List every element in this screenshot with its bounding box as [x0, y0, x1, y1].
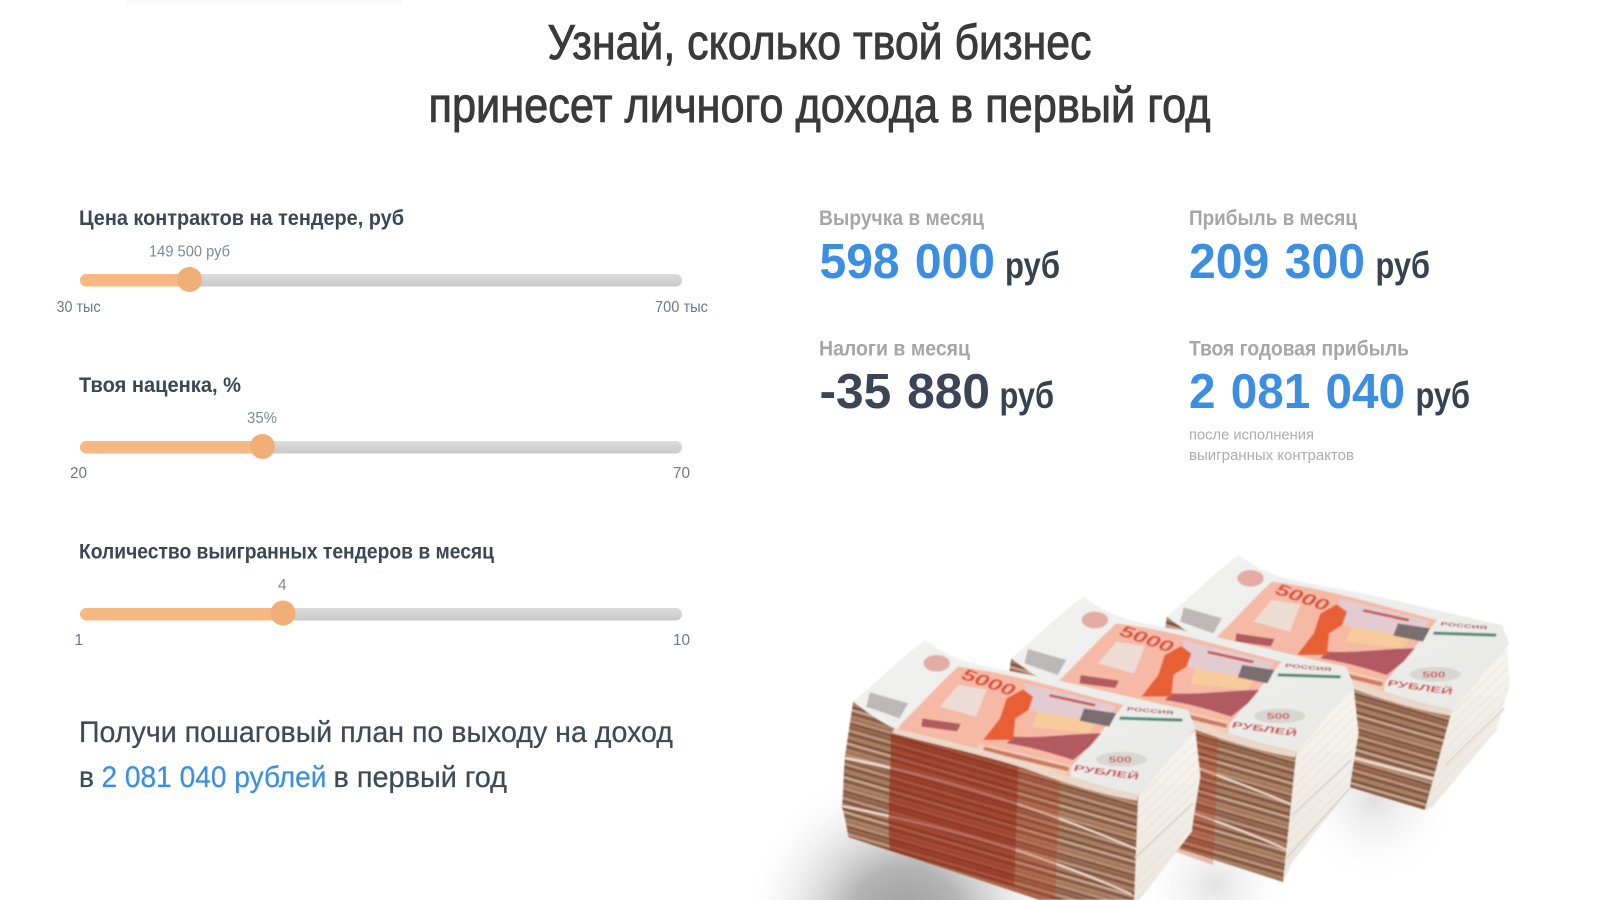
call to action text: [79, 716, 673, 794]
slider fill: contract price: [80, 274, 190, 286]
stat: annual profit: выигранных контрактов: [1189, 447, 1354, 464]
call to action text: в: [79, 761, 94, 794]
stat: annual profit: Твоя годовая прибыль: [1189, 338, 1409, 360]
title: Узнай, сколько твой бизнес: [548, 16, 1092, 70]
slider label: tenders won: Количество выигранных тендеров в месяц: [79, 540, 494, 564]
back stack: [1159, 555, 1510, 810]
stat: annual profit: [1189, 338, 1470, 464]
call to action text: Получи пошаговый план по выходу на доход: [79, 716, 673, 749]
range maximum: tenders won: 10: [673, 632, 690, 649]
stat: monthly taxes: -35 880: [820, 365, 990, 419]
slider knob: tenders won: [270, 600, 296, 626]
slider track: markup: [80, 441, 682, 454]
range minimum: tenders won: 1: [74, 632, 83, 649]
middle stack: [1000, 597, 1359, 882]
stat: monthly profit: 209 300: [1189, 235, 1365, 289]
slider fill: tenders won: [80, 608, 283, 620]
title: [428, 16, 1210, 133]
call to action text: в первый год: [334, 761, 507, 794]
stat: monthly revenue: [819, 207, 1060, 289]
stat: monthly revenue: Выручка в месяц: [819, 207, 984, 230]
range maximum: contract price: 700 тыс: [655, 299, 708, 316]
stat: monthly revenue: руб: [1005, 245, 1060, 286]
image: stacks of banknotes: [740, 555, 1510, 900]
current value: markup: 35%: [247, 410, 277, 427]
stat: monthly revenue: 598 000: [820, 235, 995, 289]
range minimum: markup: 20: [70, 465, 87, 482]
top edge shadow: [127, 0, 402, 8]
stack shadows: [740, 715, 1460, 900]
current value: tenders won: 4: [278, 577, 287, 594]
stat: monthly profit: Прибыль в месяц: [1189, 207, 1357, 230]
stat: annual profit: руб: [1416, 375, 1470, 416]
range maximum: markup: 70: [673, 465, 690, 482]
slider knob: contract price: [177, 267, 202, 292]
stat: monthly taxes: [819, 338, 1054, 419]
panel: contract price slider: [56, 207, 708, 316]
title: принесет личного дохода в первый год: [428, 79, 1210, 133]
slider label: contract price: Цена контрактов на тендере, руб: [79, 207, 404, 230]
slider track: tenders won: [80, 608, 682, 620]
slider track: contract price: [80, 274, 682, 286]
stat: monthly taxes: руб: [1000, 375, 1054, 416]
stat: monthly taxes: Налоги в месяц: [819, 338, 970, 360]
range minimum: contract price: 30 тыс: [56, 299, 101, 316]
panel: markup slider: [70, 374, 690, 482]
stat: monthly profit: [1189, 207, 1430, 289]
slider label: markup: Твоя наценка, %: [79, 374, 241, 397]
panel: tenders won slider: [74, 540, 690, 649]
stat: annual profit: 2 081 040: [1189, 365, 1405, 419]
current value: contract price: 149 500 руб: [149, 244, 230, 260]
slider fill: markup: [80, 441, 263, 454]
call to action text: 2 081 040 рублей: [102, 761, 326, 794]
slider knob: markup: [250, 434, 275, 459]
front stack: [842, 640, 1201, 900]
stat: annual profit: после исполнения: [1189, 426, 1314, 444]
stat: monthly profit: руб: [1376, 245, 1430, 286]
